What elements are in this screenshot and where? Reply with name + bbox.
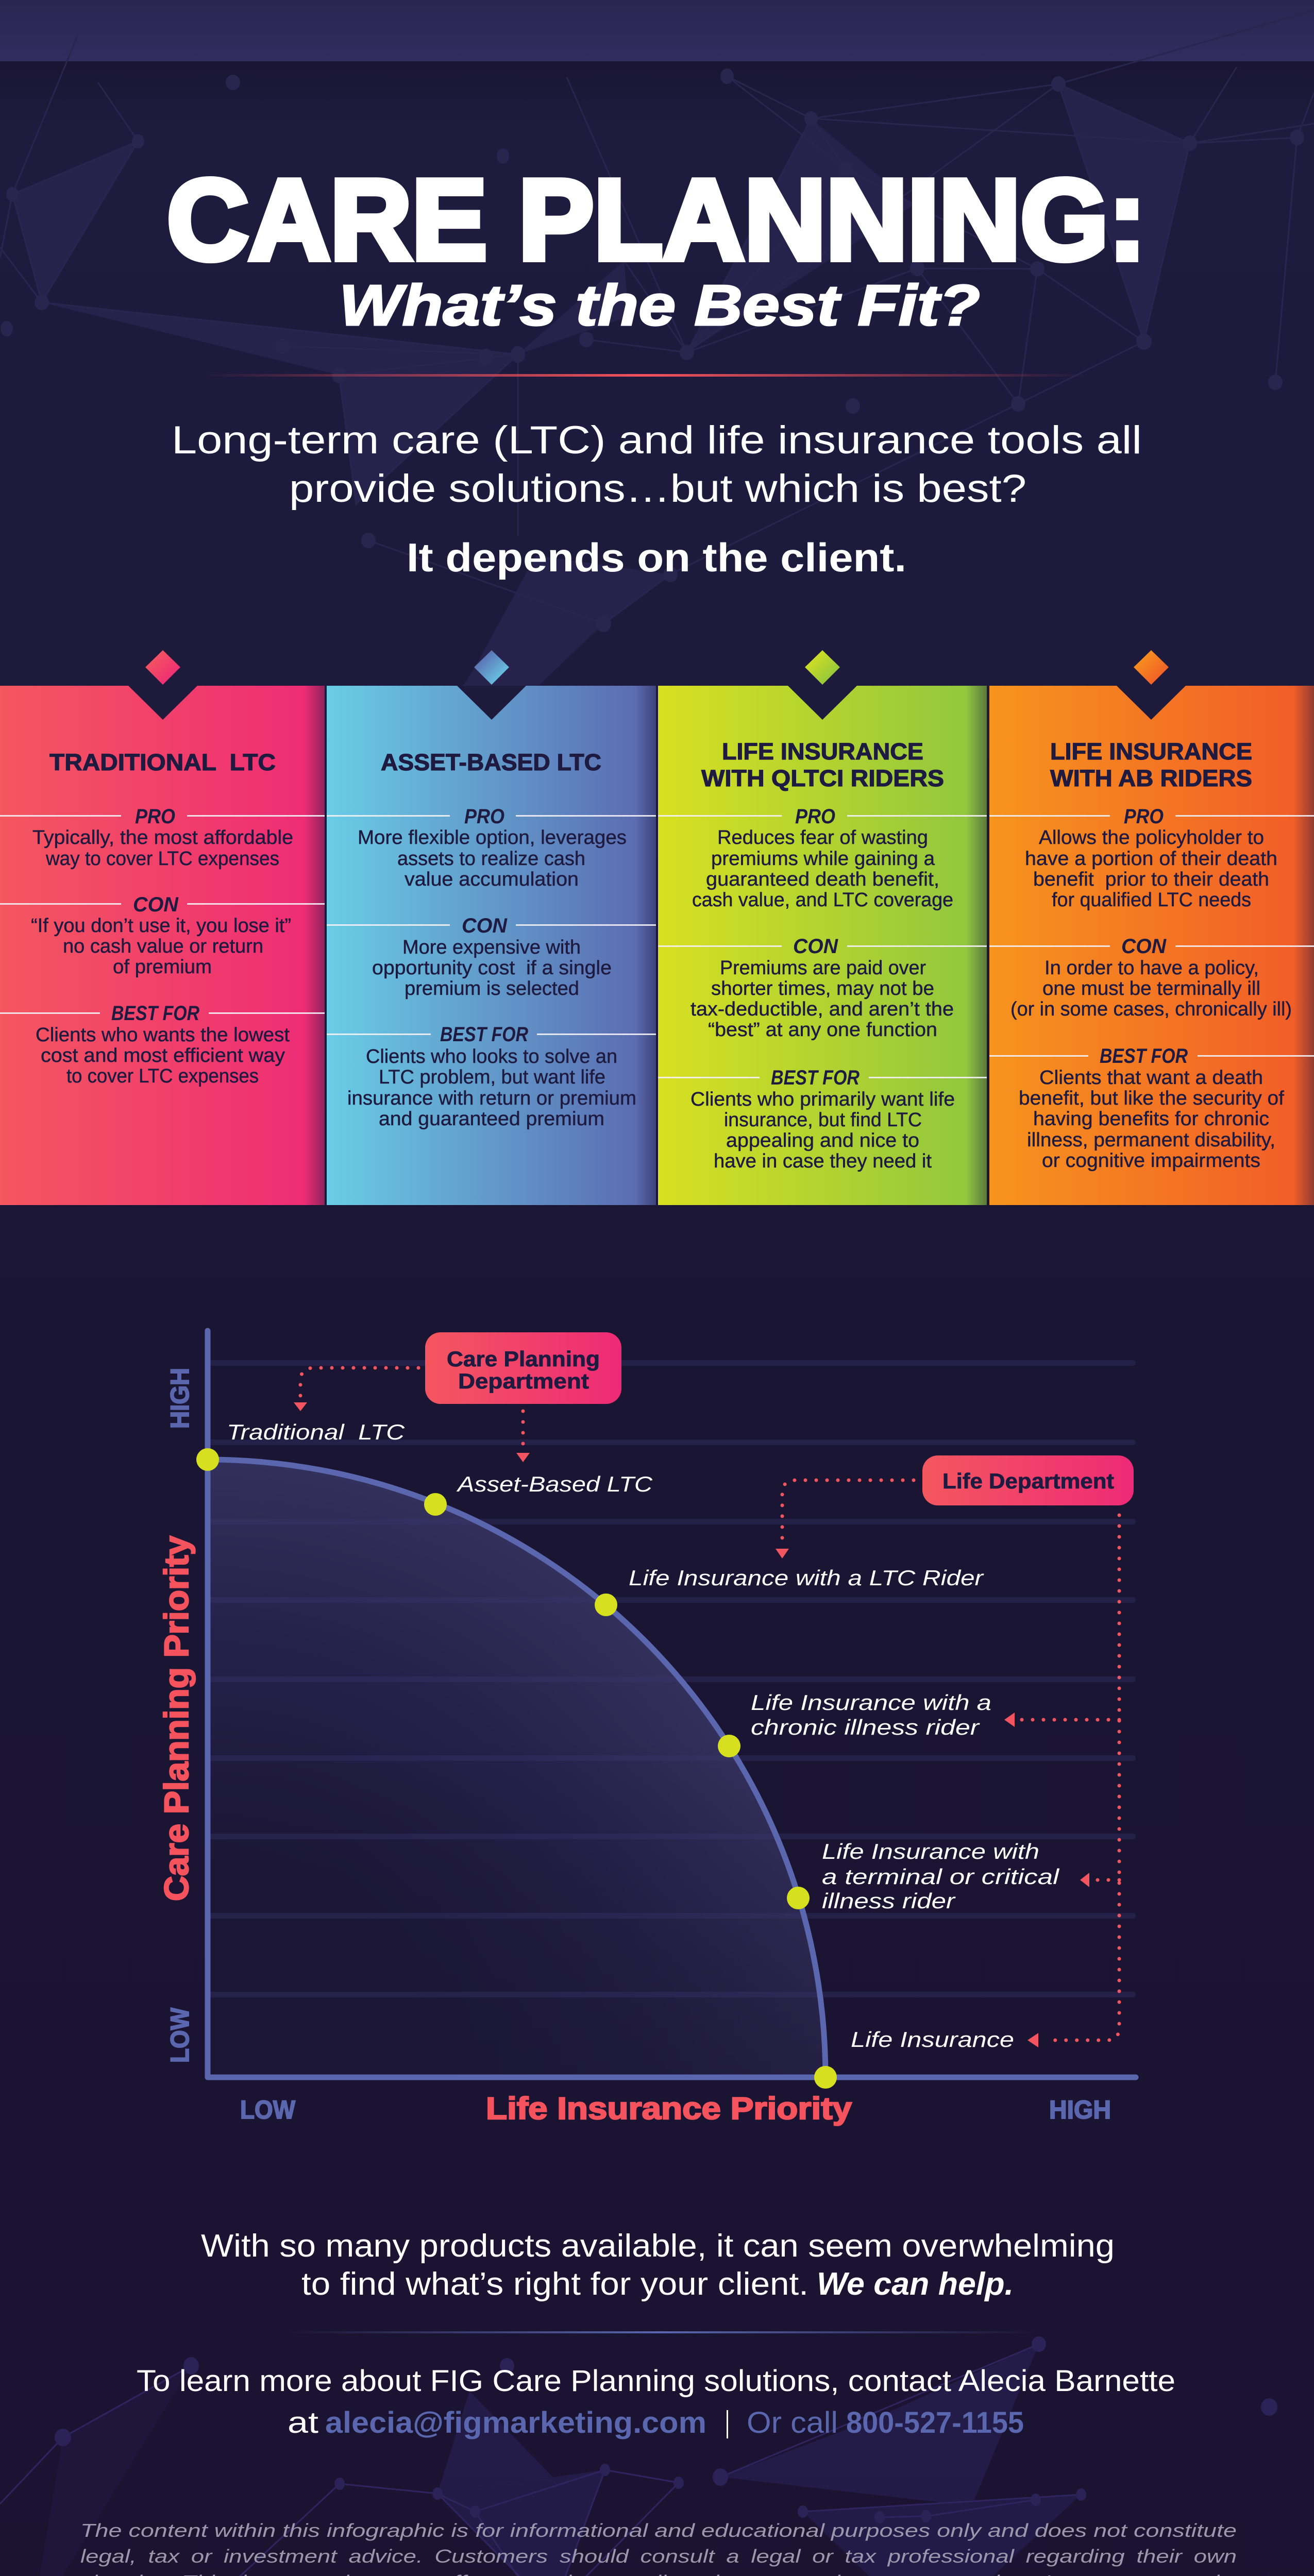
curve point labels: Traditional LTC — [227, 1420, 405, 1444]
pro section: More flexible option, leverages — [358, 827, 627, 849]
con section: Premiums are paid over — [720, 957, 926, 979]
best for section: having benefits for chronic — [1033, 1108, 1269, 1130]
contact information — [137, 2364, 1175, 2439]
best for section: BEST FOR — [111, 1002, 199, 1025]
background network: top — [0, 10, 1314, 686]
intro emphasis: It depends on the client. — [407, 535, 906, 580]
curve area fade — [208, 1460, 826, 2077]
contact information: To learn more about FIG Care Planning solutions, contact Alecia Barnette — [137, 2364, 1175, 2398]
con section: tax-deductible, and aren’t the — [690, 998, 954, 1020]
pro section: benefit prior to their death — [1033, 869, 1269, 890]
con section: “best” at any one function — [708, 1019, 937, 1041]
title: CARE PLANNING: — [167, 156, 1146, 284]
y axis high label: HIGH — [165, 1368, 194, 1429]
best for section — [658, 1066, 987, 1172]
con section: CON — [462, 914, 508, 937]
best for section: Clients who primarily want life — [690, 1089, 955, 1110]
pro section: Allows the policyholder to — [1039, 827, 1264, 849]
best for section: Clients who wants the lowest — [36, 1024, 290, 1046]
panel: traditional LTC — [0, 650, 325, 1205]
best for section: insurance with return or premium — [347, 1088, 636, 1109]
icon: diamond — [474, 650, 509, 685]
curve point labels: Life Insurance with a — [751, 1690, 991, 1715]
pro section — [658, 805, 987, 911]
con section: premium is selected — [405, 978, 579, 999]
arrow: life department to LTC rider — [776, 1480, 914, 1558]
best for section: insurance, but find LTC — [724, 1109, 922, 1131]
arrow: life department to chronic rider — [1004, 1713, 1119, 1727]
best for section: illness, permanent disability, — [1027, 1129, 1275, 1151]
curve points — [196, 1448, 837, 2089]
blue divider — [285, 2331, 1039, 2333]
card background — [327, 686, 656, 1205]
card heading: ASSET-BASED LTC — [381, 749, 601, 775]
top band — [0, 0, 1314, 61]
pro section: assets to realize cash — [397, 848, 585, 870]
curve point labels: chronic illness rider — [751, 1715, 980, 1739]
best for section — [0, 1002, 325, 1087]
con section: opportunity cost if a single — [372, 957, 612, 979]
con section — [327, 914, 656, 999]
closing message — [201, 2228, 1115, 2302]
icon: diamond — [145, 650, 180, 685]
closing message: We can help. — [817, 2266, 1014, 2302]
card background — [989, 686, 1314, 1205]
life department box — [922, 1455, 1134, 1505]
x axis title: Life Insurance Priority — [486, 2091, 852, 2126]
axes — [208, 1331, 1136, 2077]
best for section — [327, 1023, 656, 1130]
disclaimer — [80, 2520, 1244, 2576]
con section — [658, 935, 987, 1041]
pro section: PRO — [1124, 805, 1164, 828]
arrow: life department to life insurance — [1027, 1515, 1119, 2047]
header shading — [0, 61, 1314, 123]
pro section: way to cover LTC expenses — [45, 848, 279, 870]
best for section: have in case they need it — [714, 1150, 932, 1172]
arrow: life department to terminal rider — [1080, 1873, 1119, 1887]
intro text: provide solutions…but which is best? — [289, 467, 1026, 511]
pro section: cash value, and LTC coverage — [692, 889, 953, 911]
contact information: Or call — [747, 2406, 838, 2439]
best for section: to cover LTC expenses — [66, 1065, 259, 1087]
con section — [0, 893, 325, 978]
y axis low label: LOW — [165, 2007, 194, 2063]
closing message: With so many products available, it can seem overwhelming — [201, 2228, 1115, 2264]
best for section: and guaranteed premium — [379, 1108, 604, 1130]
pro section: Typically, the most affordable — [32, 827, 293, 849]
best for section: BEST FOR — [771, 1066, 860, 1089]
best for section: BEST FOR — [1100, 1045, 1188, 1067]
best for section: Clients who looks to solve an — [366, 1046, 617, 1067]
pro section: PRO — [795, 805, 835, 828]
subtitle: What’s the Best Fit? — [339, 273, 980, 337]
card heading: LIFE INSURANCE — [1050, 738, 1252, 765]
pro section: guaranteed death benefit, — [706, 869, 939, 890]
curve line — [208, 1460, 826, 2077]
card heading — [1050, 738, 1252, 791]
pro section: Reduces fear of wasting — [717, 827, 928, 849]
disclaimer: legal, tax or investment advice. Customers should consult a legal or tax professional regarding their own — [80, 2546, 1237, 2567]
care planning department box: Care Planning — [447, 1347, 600, 1371]
pro section: value accumulation — [405, 869, 579, 890]
best for section: benefit, but like the security of — [1019, 1088, 1284, 1109]
care planning department box — [425, 1332, 621, 1404]
y axis title: Care Planning Priority — [157, 1536, 195, 1901]
con section: “If you don’t use it, you lose it” — [31, 915, 291, 937]
pro section — [989, 805, 1314, 911]
con section: of premium — [113, 956, 212, 978]
best for section: Clients that want a death — [1039, 1067, 1263, 1089]
pro section — [0, 805, 325, 870]
care planning department box: Department — [458, 1369, 589, 1393]
x axis low label: LOW — [240, 2095, 296, 2124]
curve point labels: Life Insurance with a LTC Rider — [629, 1566, 984, 1590]
panel: asset-based LTC — [327, 650, 656, 1205]
pro section: have a portion of their death — [1025, 848, 1277, 870]
contact information: alecia@figmarketing.com — [325, 2406, 706, 2439]
pro section: premiums while gaining a — [711, 848, 935, 870]
best for section: LTC problem, but want life — [379, 1066, 605, 1088]
card background — [658, 686, 987, 1205]
pro section — [327, 805, 656, 890]
curve point labels: illness rider — [822, 1889, 956, 1913]
curve point labels — [227, 1420, 1060, 2052]
con section: (or in some cases, chronically ill) — [1010, 998, 1292, 1020]
best for section: cost and most efficient way — [41, 1045, 285, 1066]
intro text — [172, 418, 1142, 511]
x axis high label: HIGH — [1049, 2095, 1111, 2124]
closing message: to find what’s right for your client. — [301, 2266, 808, 2302]
card heading — [701, 738, 944, 791]
card heading: LIFE INSURANCE — [722, 738, 923, 765]
pro section: for qualified LTC needs — [1052, 889, 1251, 911]
best for section: appealing and nice to — [726, 1130, 919, 1151]
con section: no cash value or return — [63, 936, 263, 957]
card heading: WITH AB RIDERS — [1050, 765, 1252, 791]
panel: life insurance with AB riders — [989, 650, 1314, 1205]
curve point labels: Life Insurance with — [822, 1839, 1039, 1863]
curve area — [208, 1460, 826, 2077]
grid lines — [208, 1360, 1136, 1997]
con section: CON — [133, 893, 179, 916]
card heading: TRADITIONAL LTC — [49, 749, 276, 775]
contact information: at — [288, 2406, 318, 2439]
background network: bottom — [0, 2336, 1277, 2576]
con section: shorter times, may not be — [711, 978, 934, 999]
best for section — [989, 1045, 1314, 1172]
card heading: WITH QLTCI RIDERS — [701, 765, 944, 791]
pro section: PRO — [464, 805, 504, 828]
arrow: care planning to asset-based LTC — [516, 1411, 530, 1462]
contact information: 800-527-1155 — [846, 2406, 1024, 2439]
best for section: BEST FOR — [440, 1023, 528, 1046]
curve point labels: Life Insurance — [851, 2027, 1014, 2052]
curve point labels: a terminal or critical — [822, 1865, 1060, 1889]
icon: diamond — [805, 650, 840, 685]
chart: priority curve — [157, 1331, 1136, 2126]
curve point labels: Asset-Based LTC — [456, 1472, 653, 1496]
con section: More expensive with — [402, 937, 581, 958]
con section: one must be terminally ill — [1042, 978, 1260, 999]
pro section: PRO — [135, 805, 175, 828]
con section: CON — [1121, 935, 1167, 958]
arrow: care planning to traditional LTC — [294, 1368, 418, 1411]
card background — [0, 686, 325, 1205]
best for section: or cognitive impairments — [1042, 1150, 1260, 1172]
icon: diamond — [1134, 650, 1169, 685]
con section: CON — [793, 935, 838, 958]
disclaimer: The content within this infographic is for informational and educational purposes only and does not constitute — [80, 2520, 1237, 2541]
con section: In order to have a policy, — [1045, 957, 1259, 979]
red divider — [201, 374, 1087, 377]
panel: life insurance with QLTCI riders — [658, 650, 987, 1205]
intro text: Long-term care (LTC) and life insurance tools all — [172, 418, 1142, 462]
life department box: Life Department — [942, 1469, 1114, 1493]
con section — [989, 935, 1314, 1020]
